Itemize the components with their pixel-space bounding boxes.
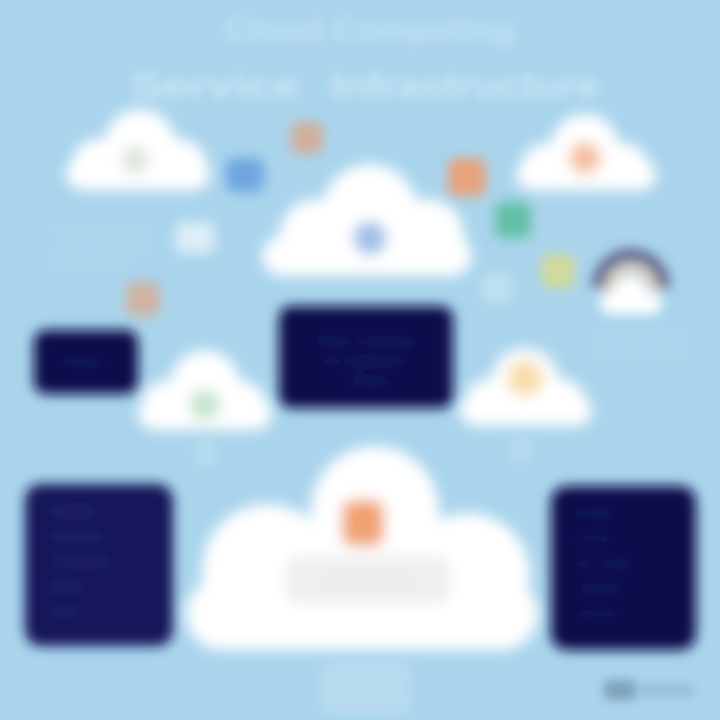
icon: yellow node	[541, 254, 575, 288]
text block: right note: Secure access	[592, 327, 688, 343]
cloud: mid right	[460, 348, 592, 426]
panel: dark centre: hosting	[345, 373, 387, 388]
text block: large cloud	[285, 556, 451, 604]
icon: muted orange left node	[126, 282, 160, 316]
panel: large dark right	[551, 486, 696, 650]
icon: large cloud	[342, 500, 384, 546]
panel: large dark right: and usage	[575, 556, 631, 570]
panel: dark centre	[279, 306, 453, 408]
panel: large dark left	[25, 484, 173, 646]
panel: large dark right: Flexible	[575, 506, 617, 520]
icon: mid right cloud	[507, 360, 543, 396]
panel: large dark left: on demand	[50, 554, 110, 568]
text block: left note: online	[52, 257, 132, 273]
panel: dark centre: and application	[322, 353, 410, 368]
panel: large dark left: Scalable	[50, 504, 96, 518]
text block: left note	[52, 223, 152, 273]
text block: left note: and services	[52, 241, 152, 257]
logo	[604, 680, 694, 700]
cloud: large bottom	[186, 446, 538, 650]
title	[130, 12, 600, 106]
panel: large dark left: resources	[50, 529, 103, 543]
text block: bottom caption	[322, 662, 410, 714]
icon: pale node	[482, 273, 512, 303]
icon: green node	[495, 202, 531, 238]
panel: small dark left: Network	[64, 355, 109, 369]
icon: pale white node	[175, 222, 215, 254]
icon: rainbow cloud	[598, 255, 664, 314]
panel: large dark left: reach	[50, 604, 80, 618]
panel: large dark right: managed	[575, 581, 625, 595]
icon: centre cloud	[353, 221, 387, 255]
icon: top right cloud	[569, 142, 601, 174]
panel: large dark right: pricing	[575, 531, 610, 545]
panel: small dark left	[34, 330, 138, 394]
text block: left note: Cloud storage	[52, 223, 152, 239]
title: Service	[130, 65, 300, 106]
text block: right note: for all users	[592, 345, 688, 361]
panel: large dark left: global	[50, 579, 82, 593]
icon: mid left cloud	[190, 390, 220, 420]
node icons	[126, 122, 575, 316]
panel: dark centre: Data processing	[319, 333, 413, 348]
cloud: top right	[516, 114, 656, 191]
icon: orange node	[448, 158, 486, 196]
cloud: top left	[66, 109, 210, 191]
cloud: large bottom: Cloud platform	[322, 572, 414, 588]
icon: blue node	[226, 158, 264, 192]
cloud: centre	[262, 164, 472, 276]
panel: large dark right: services	[575, 606, 619, 620]
cloud: mid left	[138, 350, 272, 430]
icon: top left cloud	[121, 146, 149, 174]
title: Infrastructure	[330, 65, 600, 106]
icon: muted orange node	[291, 122, 323, 154]
title: Cloud Computing	[225, 12, 515, 48]
text block: right note	[592, 327, 688, 361]
connector labels	[195, 436, 532, 466]
